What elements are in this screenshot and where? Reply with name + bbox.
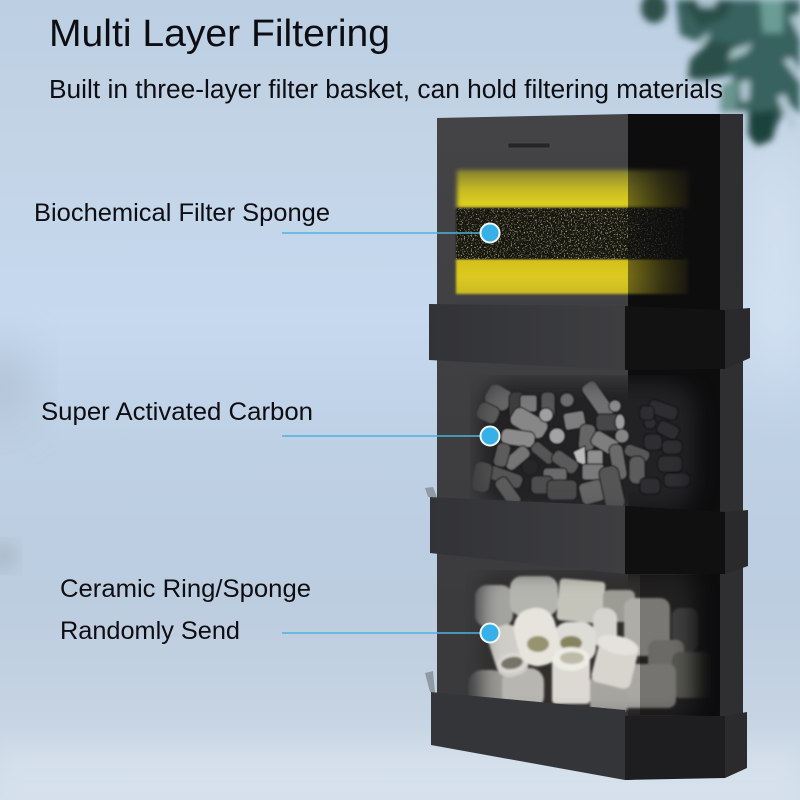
title: Multi Layer Filtering	[49, 13, 390, 55]
ring: center rear	[554, 622, 596, 662]
callout: ceramic ring / sponge	[60, 575, 500, 645]
ceramic layer rings	[469, 570, 706, 716]
ring: left	[487, 623, 530, 678]
shadowed sponge on dark side	[628, 164, 698, 300]
callout: super activated carbon	[41, 398, 500, 446]
collar band 2	[425, 487, 748, 574]
ring: front	[552, 647, 590, 704]
carbon layer pellets	[472, 376, 698, 509]
top slot	[508, 143, 550, 148]
black sponge band	[456, 208, 684, 259]
yellow sponge, top	[457, 170, 689, 208]
subtitle: Built in three-layer filter basket, can hold filtering materials	[49, 76, 723, 104]
dim back rings	[475, 585, 513, 627]
callout: ceramic ring / sponge: Ceramic Ring/Sponge	[60, 575, 311, 603]
callout: super activated carbon: Super Activated Carbon	[41, 398, 313, 426]
shadowed pellets on dark side	[640, 398, 690, 494]
box body: front face	[437, 114, 628, 780]
base tray	[425, 671, 747, 780]
filter box	[425, 114, 750, 780]
ring: right	[590, 631, 641, 690]
ring: tall center-left	[512, 606, 560, 668]
callout: biochemical filter sponge	[34, 199, 500, 242]
callout: ceramic ring / sponge: Randomly Send	[60, 617, 240, 645]
leaves: blurred plant, top right	[641, 0, 800, 146]
collar band 1	[429, 304, 750, 370]
callout: biochemical filter sponge: Biochemical Filter Sponge	[34, 199, 330, 227]
yellow sponge, bottom	[456, 259, 688, 294]
box body: side and back	[628, 114, 743, 780]
sponge layer window	[456, 164, 698, 300]
